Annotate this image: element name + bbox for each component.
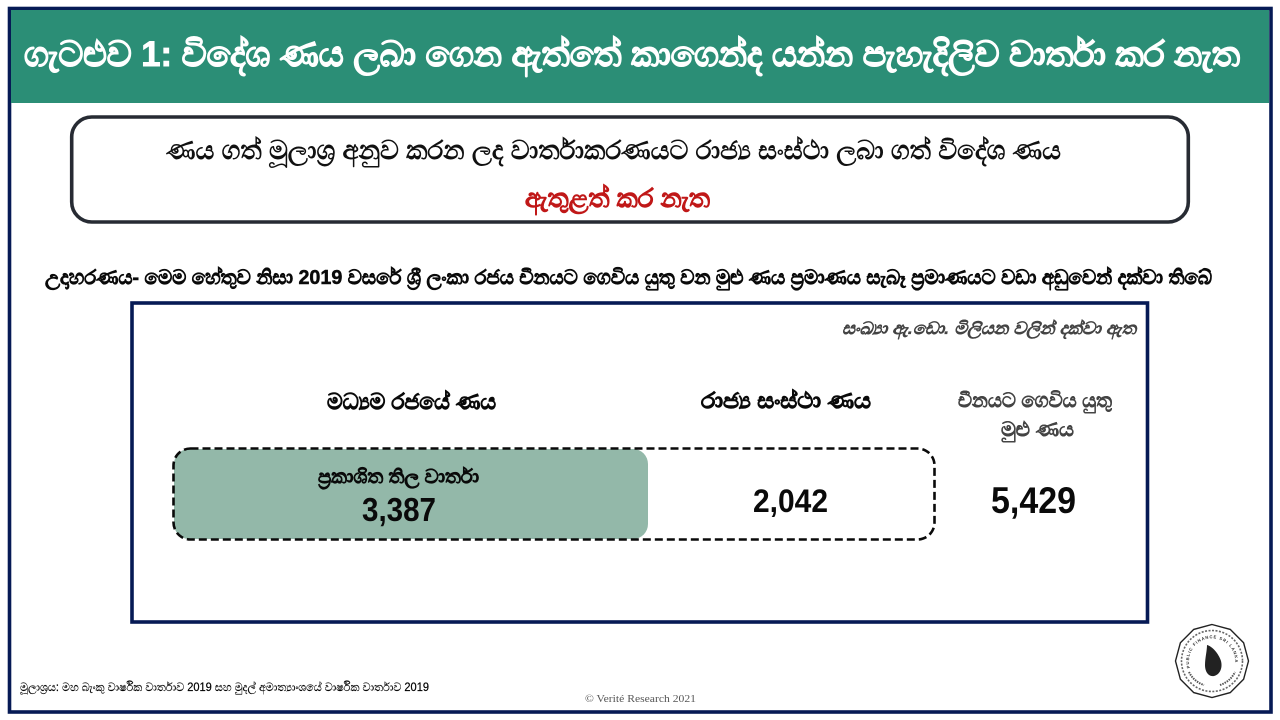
- seal lower ornaments: [1189, 672, 1235, 685]
- unit note: සංඛ්‍යා ඇ.ඩො. මිලියන වලින් දක්වා ඇත: [842, 319, 1138, 340]
- seal lettering: PUBLIC FINANCE SRI LANKA: [1186, 635, 1238, 668]
- copyright: © Verité Research 2021: [585, 694, 696, 705]
- highlighted block: published official reports: [174, 449, 648, 539]
- value: 2,042: 2,042: [753, 483, 828, 519]
- column heading: total debt owed to China: චීනයට ගෙවිය යුතු: [958, 390, 1113, 415]
- value: 3,387: 3,387: [362, 491, 436, 528]
- source note: මූලාශ්‍රය: මහ බැංකු වාර්ෂික වාර්තාව 2019 සහ මුදල් අමාත්‍යාංශයේ වාර්ෂික වාර්තාව 2019: [19, 680, 429, 695]
- panel: debt comparison: [132, 303, 1148, 622]
- column heading: total debt owed to China: [958, 390, 1113, 444]
- example text block: උදාහරණය- මෙම හේතුව නිසා 2019 වසරේ ශ්‍රී ලංකා රජය චීනයට ගෙවිය යුතු වන මුළු ණය ප්‍රමාණය සැබෑ ප්‍රමාණයට වඩා අඩුවෙන් දක්වා තිබේ: [45, 265, 1212, 292]
- icon: Public Finance Sri Lanka seal: [1174, 624, 1250, 698]
- column heading: total debt owed to China: මුළු ණය: [1001, 419, 1074, 444]
- dashed bracket around debt components: [174, 448, 934, 540]
- callout statement: ණය ගත් මූලාශ්‍ර අනුව කරන ලද වාර්තාකරණයට රාජ්‍ය සංස්ථා ලබා ගත් විදේශ ණය: [166, 135, 1061, 168]
- value: 5,429: 5,429: [991, 480, 1076, 521]
- callout emphasis in red: ඇතුළත් කර නැත: [525, 183, 710, 216]
- title: ගැටළුව 1: විදේශ ණය ලබා ගෙන ඇත්තේ කාගෙන්ද යන්න පැහැදිලිව වාර්තා කර නැත: [24, 35, 1241, 77]
- island of Sri Lanka: [1205, 645, 1222, 676]
- header banner: [11, 10, 1269, 103]
- callout: reporting problem: [72, 117, 1188, 222]
- block label: ප්‍රකාශිත තිල වාර්තා: [318, 466, 479, 490]
- column heading: state enterprise debt: රාජ්‍ය සංස්ථා ණය: [701, 388, 871, 413]
- column heading: central government debt: මධ්‍යම රජයේ ණය: [327, 389, 496, 414]
